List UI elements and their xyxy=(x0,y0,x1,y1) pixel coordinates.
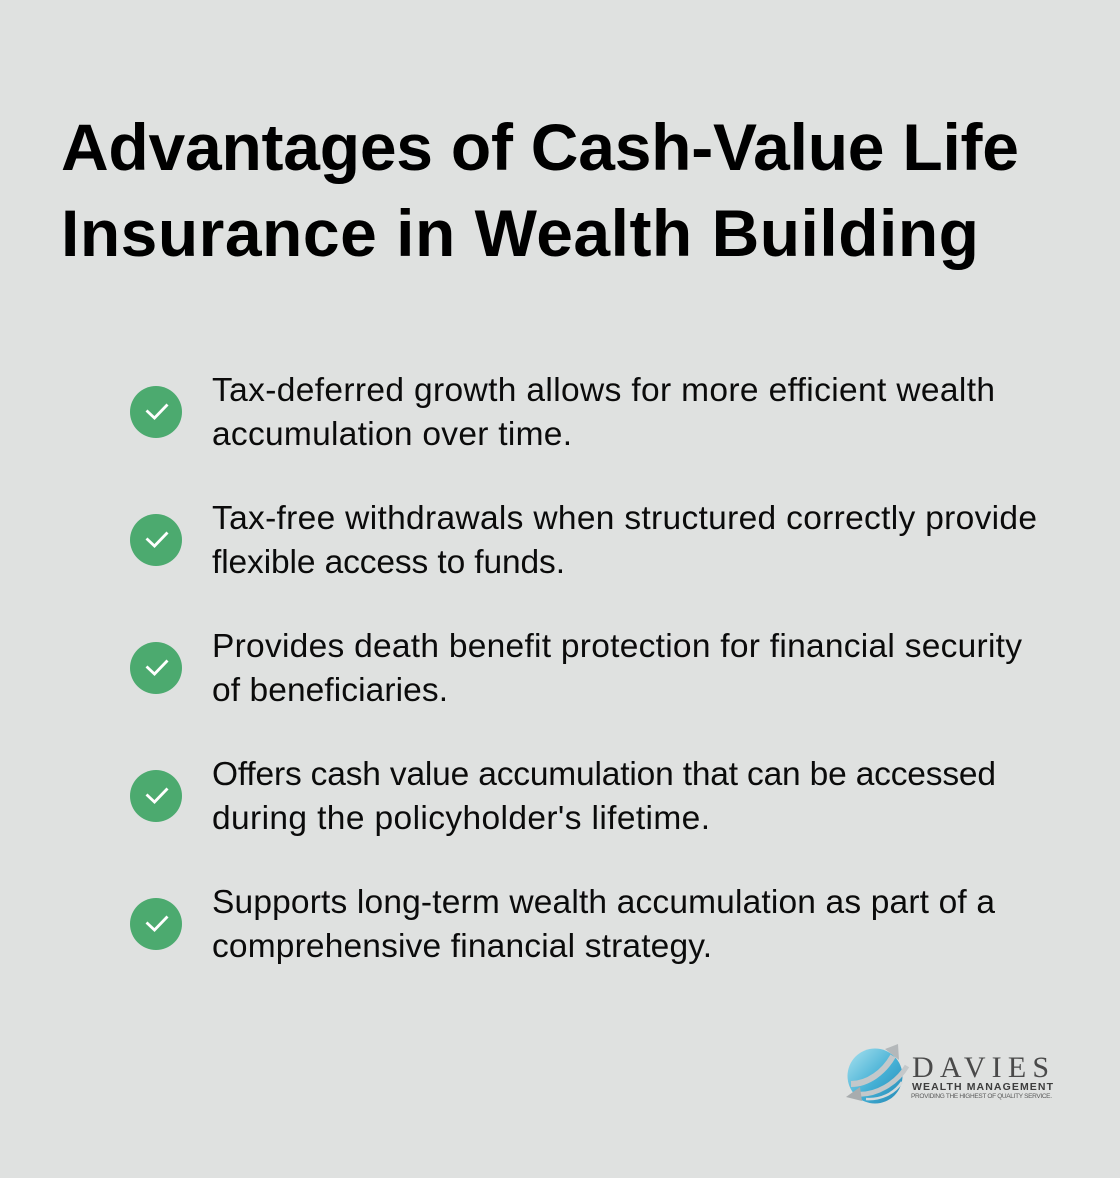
icon: check 4 xyxy=(130,770,182,822)
text 4 xyxy=(212,756,996,837)
icon: check 3 xyxy=(130,642,182,694)
icon: check 2 xyxy=(130,514,182,566)
text 4: during the policyholder's lifetime. xyxy=(212,800,710,837)
logo tagline: PROVIDING THE HIGHEST OF QUALITY SERVICE. xyxy=(911,1093,1052,1100)
text 5: Supports long-term wealth accumulation as part of a xyxy=(212,884,995,921)
item 1 xyxy=(130,372,995,453)
text 4: Offers cash value accumulation that can be accessed xyxy=(212,756,996,793)
title: Advantages of Cash-Value Life xyxy=(61,110,1019,184)
icon: check 5 xyxy=(130,898,182,950)
text 5 xyxy=(212,884,995,965)
logo: Davies Wealth Management xyxy=(846,1044,1054,1104)
logo subtitle: WEALTH MANAGEMENT xyxy=(912,1081,1054,1093)
logo wordmark: DAVIES xyxy=(912,1051,1049,1084)
text 1: accumulation over time. xyxy=(212,416,572,453)
text 3 xyxy=(212,628,1022,709)
text 2 xyxy=(212,500,1037,581)
text 3: of beneficiaries. xyxy=(212,672,448,709)
text 3: Provides death benefit protection for financial security xyxy=(212,628,1022,665)
title xyxy=(61,110,1019,270)
item 5 xyxy=(130,884,995,965)
item 3 xyxy=(130,628,1022,709)
text 5: comprehensive financial strategy. xyxy=(212,928,712,965)
text 1 xyxy=(212,372,995,453)
item 4 xyxy=(130,756,996,837)
item 2 xyxy=(130,500,1037,581)
text 1: Tax-deferred growth allows for more efficient wealth xyxy=(212,372,995,409)
text 2: flexible access to funds. xyxy=(212,544,565,581)
icon: check 1 xyxy=(130,386,182,438)
list of advantages xyxy=(130,372,1037,965)
icon: globe with arrows xyxy=(846,1044,907,1104)
text 2: Tax-free withdrawals when structured correctly provide xyxy=(212,500,1037,537)
title: Insurance in Wealth Building xyxy=(61,196,979,270)
